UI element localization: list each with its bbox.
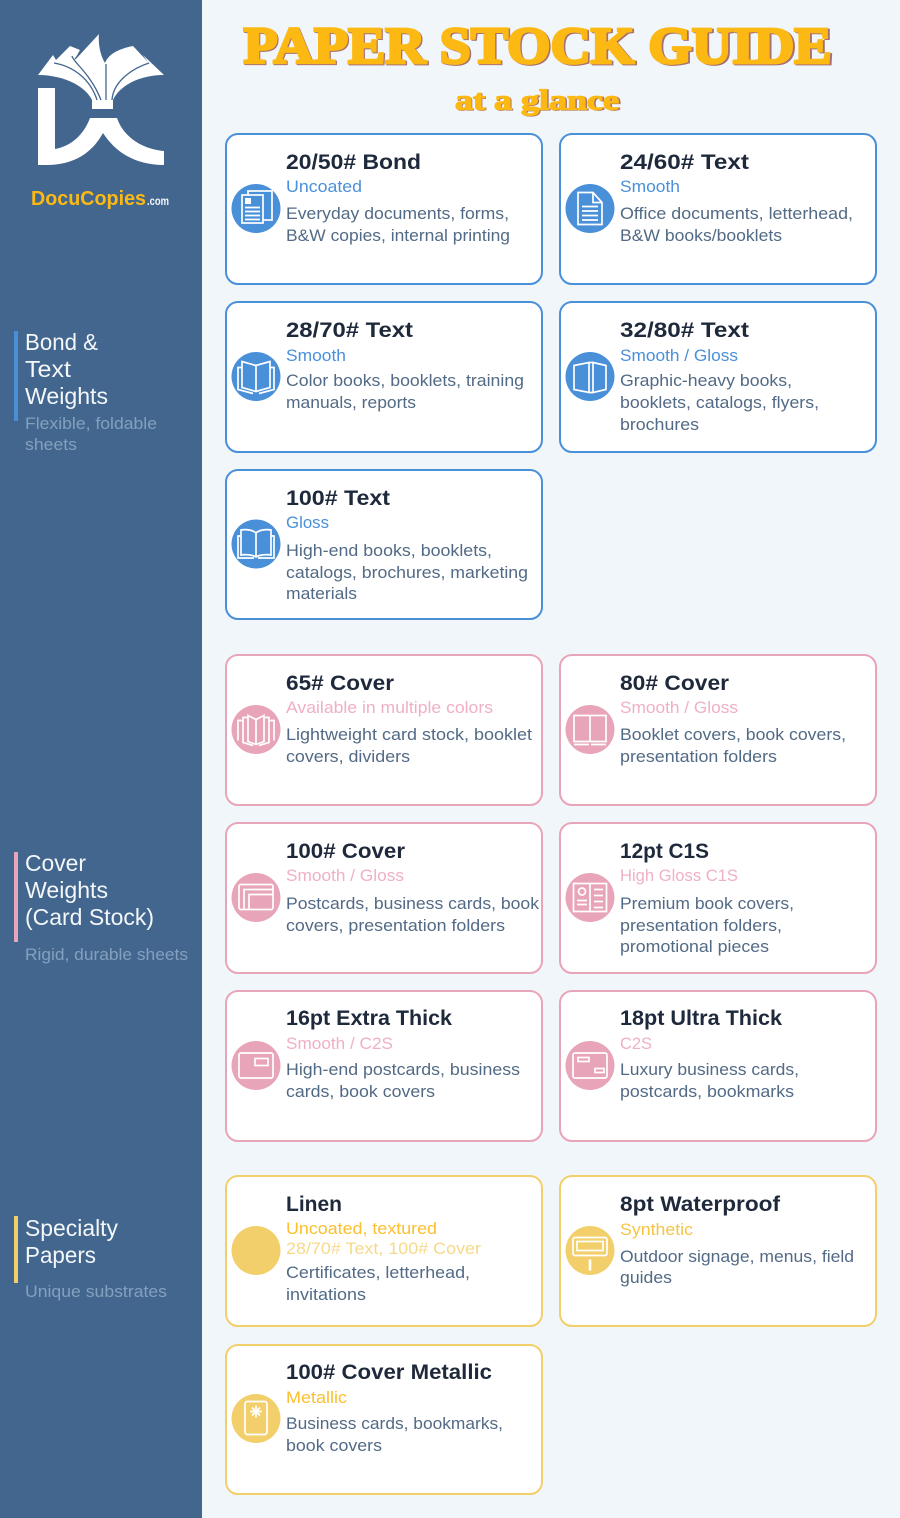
card: 16pt Extra Thick	[226, 991, 542, 1141]
title: PAPER STOCK GUIDE	[244, 19, 834, 76]
section label: bond and text weights: Weights	[25, 383, 108, 409]
section label: bond and text weights: sheets	[25, 436, 77, 454]
section label: bond and text weights: Flexible, foldable	[25, 415, 157, 433]
card: 20/50# Bond: B&W copies, internal printing	[286, 227, 510, 245]
icon: open folded brochure	[566, 352, 614, 401]
icon: outdoor sign	[566, 1226, 614, 1275]
section label: cover weights	[14, 850, 188, 964]
card: 32/80# Text	[560, 302, 876, 452]
icon: book and DC monogram	[38, 33, 164, 165]
card: 28/70# Text: Color books, booklets, training	[286, 372, 524, 390]
card: 100# Text: catalogs, brochures, marketing	[286, 564, 528, 582]
subtitle: at a glance	[456, 86, 621, 117]
section label: bond and text weights	[14, 329, 157, 454]
card: 100# Cover Metallic: book covers	[286, 1437, 382, 1455]
icon: stacked documents	[232, 184, 280, 233]
icon: plain linen circle	[232, 1226, 280, 1275]
card: 28/70# Text	[226, 302, 542, 452]
card: 100# Text: 100# Text	[286, 486, 390, 510]
card: 80# Cover: presentation folders	[620, 748, 777, 766]
card: 8pt Waterproof	[560, 1176, 876, 1326]
card: 32/80# Text: Graphic-heavy books,	[620, 372, 792, 390]
subtitle: at a glance	[455, 86, 619, 116]
card: Linen: Uncoated, textured	[286, 1220, 437, 1238]
card: 80# Cover: Smooth / Gloss	[620, 699, 738, 717]
card: 100# Text: Gloss	[286, 514, 329, 532]
card: 12pt C1S: High Gloss C1S	[620, 867, 738, 885]
card: 12pt C1S: promotional pieces	[620, 938, 769, 956]
card: 65# Cover	[226, 655, 542, 805]
title: PAPER STOCK GUIDE	[244, 18, 832, 75]
card: 20/50# Bond: Everyday documents, forms,	[286, 205, 509, 223]
card: 16pt Extra Thick: High-end postcards, business	[286, 1061, 520, 1079]
card: 80# Cover: Booklet covers, book covers,	[620, 726, 846, 744]
card: 100# Cover: 100# Cover	[286, 839, 406, 863]
section label: bond and text weights: Bond &	[25, 329, 98, 355]
icon: open booklet	[232, 352, 280, 401]
card: 16pt Extra Thick: 16pt Extra Thick	[286, 1006, 452, 1030]
card: 32/80# Text: Smooth / Gloss	[620, 347, 738, 365]
icon: document	[566, 184, 614, 233]
icon: metallic card with shine	[232, 1394, 280, 1443]
card: 100# Cover: Postcards, business cards, book	[286, 895, 540, 913]
icon: layered cards	[232, 873, 280, 922]
card: 80# Cover: 80# Cover	[620, 671, 730, 695]
card: Linen: invitations	[286, 1286, 366, 1304]
logo wordmark: DocuCopies	[31, 187, 146, 210]
card: 100# Cover Metallic: Metallic	[286, 1389, 347, 1407]
card: 18pt Ultra Thick	[560, 991, 876, 1141]
card: 18pt Ultra Thick: C2S	[620, 1035, 652, 1053]
section label: bond and text weights: Text	[25, 356, 72, 382]
card: 24/60# Text	[560, 134, 876, 284]
card: 8pt Waterproof: 8pt Waterproof	[620, 1192, 781, 1216]
card: Linen: Certificates, letterhead,	[286, 1264, 470, 1282]
card: 65# Cover: covers, dividers	[286, 748, 410, 766]
icon: thick postcard	[232, 1041, 280, 1090]
card: 100# Text: High-end books, booklets,	[286, 542, 492, 560]
card: 16pt Extra Thick: Smooth / C2S	[286, 1035, 393, 1053]
card: 32/80# Text: 32/80# Text	[620, 318, 749, 342]
icon: open book	[232, 520, 280, 568]
card: 24/60# Text: B&W books/booklets	[620, 227, 782, 245]
icon: book with cover	[566, 705, 614, 754]
card: 65# Cover: 65# Cover	[286, 671, 395, 695]
card: 100# Cover Metallic	[226, 1345, 542, 1494]
section label: specialty papers	[14, 1215, 167, 1301]
card: 100# Cover Metallic: Business cards, bookmarks,	[286, 1415, 503, 1433]
card: 12pt C1S: presentation folders,	[620, 917, 782, 935]
card: 24/60# Text: 24/60# Text	[620, 150, 749, 174]
card: Linen: Linen	[286, 1192, 342, 1216]
card: 100# Text	[226, 470, 542, 619]
card: 80# Cover	[560, 655, 876, 805]
card: 100# Text: materials	[286, 585, 357, 603]
card: 16pt Extra Thick: cards, book covers	[286, 1083, 435, 1101]
card: 8pt Waterproof: Outdoor signage, menus, field	[620, 1248, 854, 1266]
card: Linen	[226, 1176, 542, 1326]
card: 28/70# Text: Smooth	[286, 347, 346, 365]
logo	[31, 33, 169, 210]
card: 32/80# Text: booklets, catalogs, flyers,	[620, 394, 819, 412]
logo domain: .com	[147, 196, 169, 208]
icon: open brochure with profile	[566, 873, 614, 922]
icon: multi-colour booklet fan	[232, 705, 280, 754]
icon: business card	[566, 1041, 614, 1090]
card: 24/60# Text: Office documents, letterhead,	[620, 205, 853, 223]
card: 12pt C1S: 12pt C1S	[620, 839, 709, 863]
card: 100# Cover	[226, 823, 542, 973]
card: 12pt C1S	[560, 823, 876, 973]
card: 32/80# Text: brochures	[620, 416, 699, 434]
card: 65# Cover: Lightweight card stock, booklet	[286, 726, 532, 744]
section label: specialty papers: Papers	[25, 1242, 96, 1268]
section label: cover weights: Weights	[25, 877, 108, 903]
section label: specialty papers: Unique substrates	[25, 1283, 167, 1301]
card: 65# Cover: Available in multiple colors	[286, 699, 493, 717]
card: 28/70# Text: 28/70# Text	[286, 318, 413, 342]
section label: cover weights: Rigid, durable sheets	[25, 946, 188, 964]
card: 100# Cover: Smooth / Gloss	[286, 867, 404, 885]
card: 20/50# Bond: Uncoated	[286, 178, 362, 196]
card: 8pt Waterproof: Synthetic	[620, 1221, 693, 1239]
card: 18pt Ultra Thick: 18pt Ultra Thick	[620, 1006, 782, 1030]
sidebar	[0, 0, 202, 1518]
section label: specialty papers: Specialty	[25, 1215, 118, 1241]
card: 20/50# Bond: 20/50# Bond	[286, 150, 421, 174]
card: 8pt Waterproof: guides	[620, 1269, 672, 1287]
card: 18pt Ultra Thick: Luxury business cards,	[620, 1061, 799, 1079]
card: 100# Cover: covers, presentation folders	[286, 917, 505, 935]
card: 100# Cover Metallic: 100# Cover Metallic	[286, 1360, 492, 1384]
section label: cover weights: Cover	[25, 850, 86, 876]
card: 18pt Ultra Thick: postcards, bookmarks	[620, 1083, 794, 1101]
card: 12pt C1S: Premium book covers,	[620, 895, 794, 913]
card: Linen: 28/70# Text, 100# Cover	[286, 1240, 482, 1258]
section label: cover weights: (Card Stock)	[25, 904, 154, 930]
card: 20/50# Bond	[226, 134, 542, 284]
card: 28/70# Text: manuals, reports	[286, 394, 416, 412]
card: 24/60# Text: Smooth	[620, 178, 680, 196]
